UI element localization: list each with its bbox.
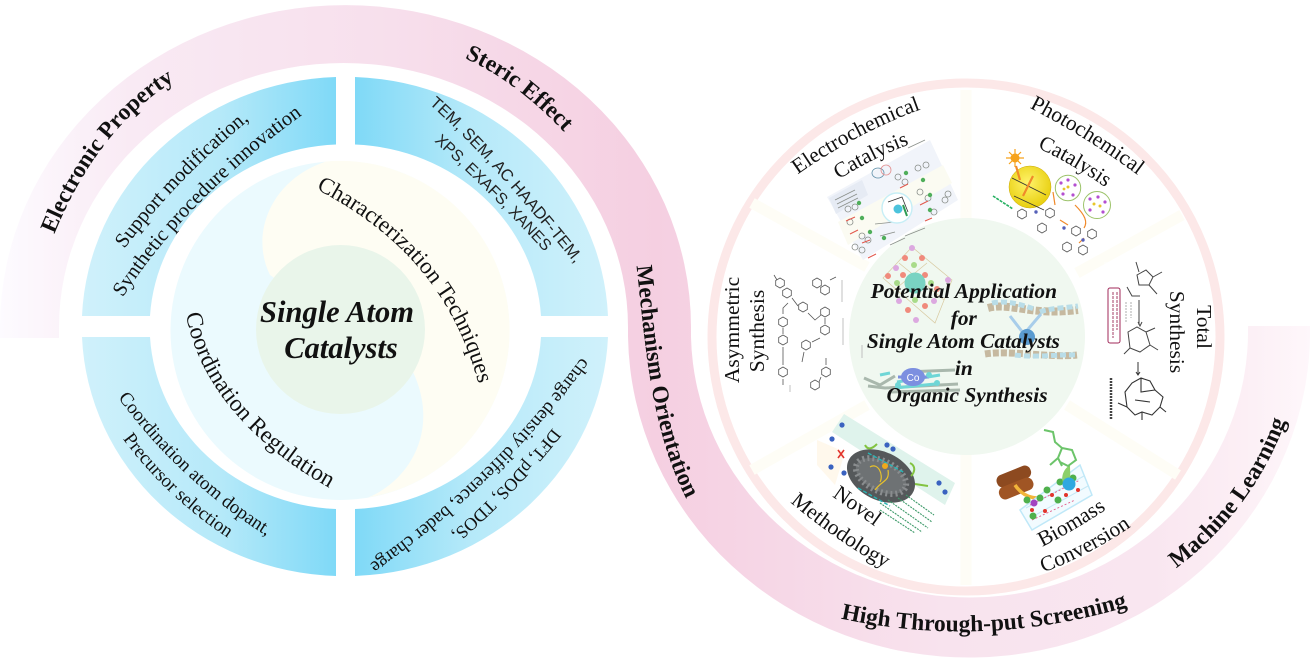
text: Support modification: Support modification, — [116, 118, 249, 248]
title: Potential Application for Single Atom Catalysts in Organic Synthesis: for — [951, 306, 978, 330]
text: TEM line: TEM, SEM, AC HAADF-TEM, — [432, 96, 580, 264]
label: Novel Methodology: Methodology — [790, 492, 890, 568]
label: Total Synthesis: Synthesis — [1165, 291, 1189, 373]
text: XPS line: XPS, EXAFS, XANES — [434, 134, 551, 250]
label: Asymmetric Synthesis — [720, 277, 769, 383]
title: Potential Application for Single Atom Catalysts in Organic Synthesis: Organic Synthesis — [886, 383, 1048, 407]
wheel: green centre — [849, 218, 1085, 455]
label: Total Synthesis: Total — [1192, 305, 1216, 349]
text: Coordination atom dopant: Coordination atom dopant, — [120, 392, 267, 537]
illustration: centre lattice — [883, 245, 952, 323]
label: Biomass Conversion: Biomass — [1036, 502, 1105, 547]
illustration: photochemical scheme — [993, 149, 1110, 255]
magenta condition box — [1108, 288, 1120, 343]
title: Single Atom Catalysts: Catalysts — [284, 331, 398, 365]
illustration: centre graphene stack — [985, 302, 1078, 356]
heading: Mechanism Orientation: Mechanism Orientation — [636, 264, 695, 499]
label: Photochemical Catalysis: Photochemical — [1030, 95, 1145, 175]
illustration: centre cobalt complex: Co — [907, 373, 920, 384]
heading: High Through-put Screening: High Through-put Screening — [841, 596, 1128, 637]
core: green centre — [256, 245, 425, 414]
illustration: novel methodology catalyst — [817, 414, 955, 533]
panel: left circle core — [170, 161, 510, 500]
label: Asymmetric Synthesis: Synthesis — [745, 290, 769, 372]
title: Potential Application for Single Atom Catalysts in Organic Synthesis: in — [955, 356, 973, 380]
panel: right application wheel — [712, 83, 1220, 591]
core: characterization lobe — [262, 161, 510, 498]
illustration: total synthesis molecules — [1104, 262, 1170, 420]
illustration: electrochemical scheme — [827, 140, 958, 260]
heading: Electronic Property: Electronic Property — [40, 72, 171, 234]
title: Single Atom Catalysts: Single Atom — [260, 295, 414, 329]
label: Electrochemical Catalysis: Catalysis — [834, 135, 908, 177]
label: Asymmetric Synthesis: Asymmetric — [720, 277, 744, 383]
illustration: biomass conversion — [995, 430, 1092, 530]
text: charge density difference: charge density difference, bader charge — [370, 359, 587, 570]
wheel: outer pink ring — [712, 83, 1220, 591]
illustration: centre cobalt complex — [864, 368, 960, 392]
heading: Steric Effect: Steric Effect — [466, 46, 572, 132]
label: Coordination Regulation: Coordination Regulation — [187, 312, 332, 488]
label: Biomass Conversion: Conversion — [1040, 520, 1131, 570]
heading: Machine Learning: Machine Learning — [1167, 418, 1289, 568]
panel: blue band bottom-right — [355, 337, 608, 576]
text: DFT line: DFT, pDOS, TDOS, — [452, 428, 562, 538]
text: Precursor selection: Precursor selection — [123, 432, 231, 538]
panel: blue band top-right — [355, 77, 608, 316]
wheel: cream spokes — [752, 90, 1182, 585]
panel: blue band bottom-left — [82, 337, 336, 576]
label: Electrochemical Catalysis: Electrochemical — [790, 96, 920, 174]
title: Potential Application for Single Atom Catalysts in Organic Synthesis: Potential Application — [870, 279, 1057, 303]
label: Novel Methodology: Novel — [832, 485, 882, 526]
text: Synthetic procedure innovation: Synthetic procedure innovation — [114, 108, 302, 296]
panel: blue band top-left — [82, 77, 336, 316]
core: coordination regulation lobe — [170, 161, 510, 500]
label: Total Synthesis — [1165, 291, 1216, 373]
illustration: asymmetric synthesis molecules — [774, 275, 862, 392]
title: Potential Application for Single Atom Catalysts in Organic Synthesis: Single Atom Catalysts — [867, 329, 1060, 353]
label: Characterization Techniques: Characterization Techniques — [319, 178, 488, 382]
label: Photochemical Catalysis: Catalysis — [1040, 137, 1110, 186]
